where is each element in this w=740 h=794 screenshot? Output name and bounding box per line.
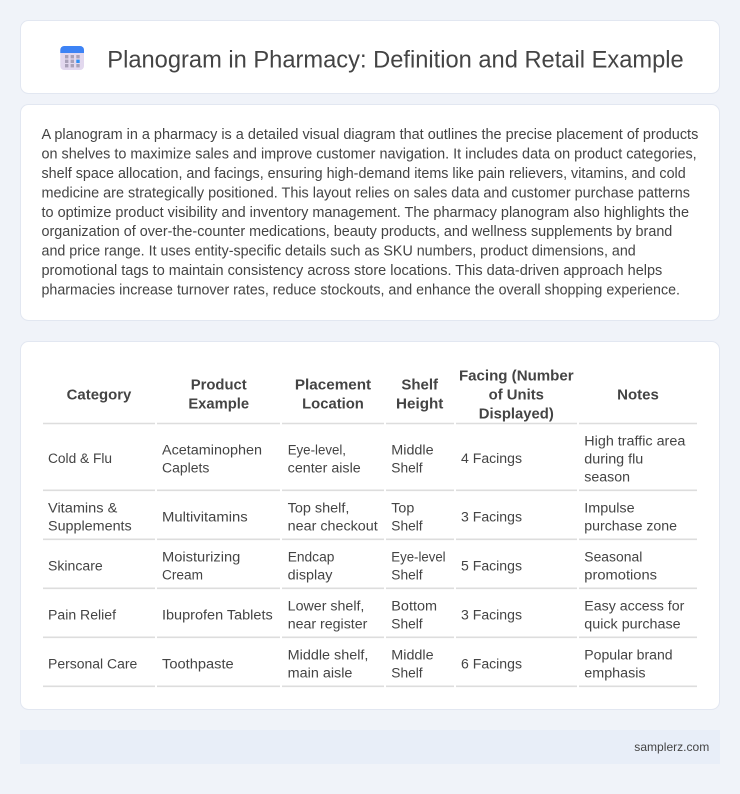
table header row: Category <box>67 386 132 403</box>
table row: Vitamins & Supplements: purchase zone <box>584 518 677 534</box>
table row: Pain Relief <box>48 598 685 632</box>
table header row: Notes <box>617 386 659 403</box>
text block: planogram description: to optimize product visibility and inventory management. The pharmacy planogram also highlights the <box>42 205 689 221</box>
text block: planogram description: pharmacies increase turnover rates, reduce stockouts, and enhance the overall shopping experience. <box>42 283 680 299</box>
table row: Skincare: display <box>288 567 333 583</box>
text block: planogram description: and price range. It uses entity-specific details such as SKU numbers, product dimensions, and <box>42 244 636 260</box>
table header row <box>67 368 659 422</box>
table row: Skincare <box>48 549 657 583</box>
table row: Pain Relief: Easy access for <box>584 598 685 614</box>
icon: planogram calendar grid <box>60 46 84 70</box>
table row: Personal Care: Personal Care <box>48 656 137 672</box>
table row: Personal Care: Middle shelf, <box>288 647 368 663</box>
table header row: Example <box>188 396 249 412</box>
table row: Cold & Flu: Middle <box>391 442 434 458</box>
table row: Skincare: Skincare <box>48 558 103 574</box>
table row: Cold & Flu: during flu <box>584 452 643 468</box>
text block: planogram description: A planogram in a pharmacy is a detailed visual diagram that outlines the precise placement of products <box>42 127 698 143</box>
table row: Skincare: Cream <box>162 567 203 583</box>
footer: samplerz.com <box>634 740 709 754</box>
text block: planogram description: organization of over-the-counter medications, beauty products, and wellness supplements by brand <box>42 224 672 240</box>
table row: Vitamins & Supplements: Top <box>391 500 414 516</box>
table row: Cold & Flu: 4 Facings <box>461 451 522 467</box>
table row: Skincare: Endcap <box>288 549 334 565</box>
table row: Vitamins & Supplements: 3 Facings <box>461 509 522 525</box>
table row: Cold & Flu: Eye-level, <box>288 442 346 458</box>
table row: Skincare: Seasonal <box>584 549 642 565</box>
table row: Personal Care: Popular brand <box>584 647 673 663</box>
table row: Skincare: promotions <box>584 567 657 583</box>
text block: planogram description <box>42 127 698 299</box>
text block: planogram description: shelf space allocation, and facings, ensuring high-demand items like pain relievers, vitamins, and cold <box>42 166 686 182</box>
table row: Cold & Flu: Cold & Flu <box>48 451 112 467</box>
table row: Vitamins & Supplements: Multivitamins <box>162 509 248 525</box>
table row: Cold & Flu: center aisle <box>288 460 361 476</box>
table row: Cold & Flu: High traffic area <box>584 434 685 450</box>
table row: Personal Care: Toothpaste <box>162 656 234 672</box>
table row: Pain Relief: Lower shelf, <box>288 598 364 614</box>
footer <box>20 730 720 764</box>
panel: title header <box>20 20 720 94</box>
table row: Personal Care: 6 Facings <box>461 656 522 672</box>
text block: planogram description: medicine are strategically positioned. This layout relies on sales data and customer purchase patterns <box>42 185 690 201</box>
table row: Personal Care <box>48 647 673 681</box>
table header row: Product <box>191 377 247 394</box>
table header row: Height <box>396 396 443 412</box>
table header row: Shelf <box>401 377 439 394</box>
table row: Pain Relief: Bottom <box>391 598 437 614</box>
table row: Pain Relief: Pain Relief <box>48 607 116 623</box>
table row: Vitamins & Supplements: Top shelf, <box>288 500 349 516</box>
table header row: Placement <box>295 377 371 394</box>
table row: Pain Relief: quick purchase <box>584 616 681 632</box>
text block: planogram description: promotional tags to maintain consistency across store locations. This data-driven approach helps <box>42 263 662 279</box>
text block: planogram description: on shelves to maximize sales and improve customer navigation. It includes data on product categories, <box>42 146 697 162</box>
table row: Skincare: Moisturizing <box>162 549 240 565</box>
panel: planogram table <box>20 342 720 710</box>
table row: Vitamins & Supplements <box>48 500 677 534</box>
table row: Personal Care: Shelf <box>391 665 423 681</box>
table row: Pain Relief: Ibuprofen Tablets <box>162 607 273 623</box>
table row: Skincare: Eye-level <box>391 549 446 565</box>
table header row: Displayed) <box>479 405 554 422</box>
table header row: of Units <box>489 386 544 404</box>
table row: Pain Relief: Shelf <box>391 616 423 632</box>
table row: Vitamins & Supplements: Vitamins & <box>48 500 118 516</box>
table row: Personal Care: main aisle <box>288 665 353 681</box>
table row: Vitamins & Supplements: Supplements <box>48 518 132 534</box>
table row: Cold & Flu: Shelf <box>391 460 423 476</box>
table row: Skincare: Shelf <box>391 567 423 583</box>
table row: Vitamins & Supplements: Shelf <box>391 518 423 534</box>
table row: Cold & Flu: season <box>584 470 630 486</box>
table row: Pain Relief: 3 Facings <box>461 607 522 623</box>
title: Planogram in Pharmacy: Definition and Retail Example <box>107 46 684 74</box>
table row: Vitamins & Supplements: Impulse <box>584 500 635 516</box>
table header row: Location <box>302 396 364 412</box>
table row: Cold & Flu <box>48 434 685 486</box>
table header row: Facing (Number <box>459 368 574 385</box>
table row: Cold & Flu: Caplets <box>162 460 209 476</box>
table row: Personal Care: emphasis <box>584 665 646 681</box>
table row: Personal Care: Middle <box>391 647 434 663</box>
panel: description <box>20 104 720 320</box>
table row: Vitamins & Supplements: near checkout <box>288 518 378 534</box>
table row: Cold & Flu: Acetaminophen <box>162 442 262 458</box>
table row: Pain Relief: near register <box>288 616 368 632</box>
table row: Skincare: 5 Facings <box>461 558 522 574</box>
